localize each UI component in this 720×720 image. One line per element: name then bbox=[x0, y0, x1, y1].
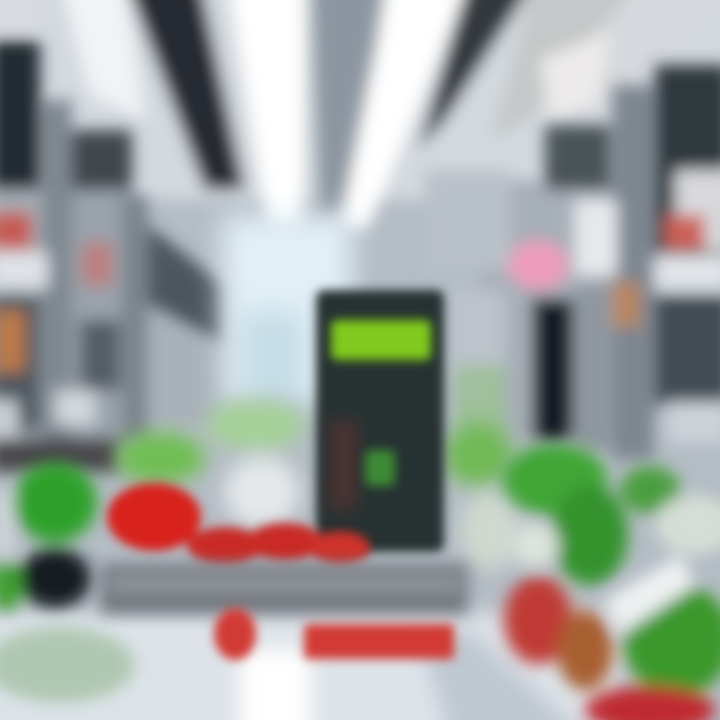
right shelving bbox=[425, 65, 720, 460]
calculator display bbox=[331, 320, 431, 360]
calculator key bbox=[365, 450, 395, 486]
counter bbox=[100, 564, 468, 614]
ceiling with light strips bbox=[0, 0, 720, 228]
produce: right foreground greens and reds bbox=[503, 444, 720, 720]
icon: calculator bbox=[316, 290, 444, 552]
floor bbox=[0, 612, 620, 720]
greens behind the counter bbox=[115, 401, 520, 570]
price tag red marks bbox=[214, 608, 454, 660]
aisle vanishing glow bbox=[222, 215, 352, 405]
left shelving bbox=[0, 0, 224, 472]
produce: tomatoes bbox=[107, 483, 370, 565]
icon: green leaf left bbox=[0, 462, 135, 703]
calculator red tint bbox=[328, 420, 358, 510]
